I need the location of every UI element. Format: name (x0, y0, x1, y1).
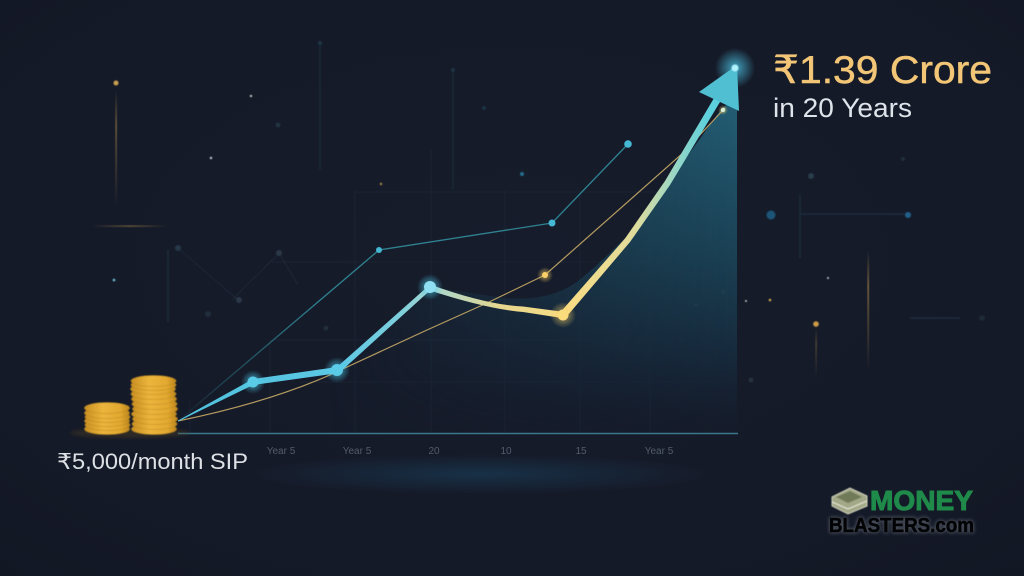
chart (178, 48, 755, 494)
logo word: MONEY: MONEY (870, 485, 973, 516)
headline subtitle: in 20 Years (773, 93, 912, 123)
main growth line (178, 93, 723, 422)
x axis labels (267, 446, 674, 457)
x axis labels: Year 5 (645, 446, 674, 457)
logo (829, 485, 974, 537)
label: monthly SIP: ₹5,000/month SIP (57, 449, 248, 474)
background grid (190, 150, 730, 432)
axis glow (250, 454, 710, 494)
area under curve (428, 105, 737, 393)
headline value: ₹1.39 Crore (773, 49, 992, 92)
logo halo behind BLASTERS.com: BLASTERS.com (829, 515, 974, 537)
data points (241, 105, 728, 394)
infographic canvas (58, 40, 990, 535)
thin teal trend line (178, 140, 632, 421)
x axis labels: 15 (575, 446, 587, 457)
small coin stack (84, 402, 130, 434)
x axis (178, 432, 738, 434)
x axis labels: Year 5 (267, 446, 296, 457)
arrow head (699, 48, 755, 111)
x axis labels: 10 (500, 446, 512, 457)
coin stacks (70, 376, 190, 438)
x axis labels: Year 5 (343, 446, 372, 457)
tall coin stack (130, 376, 178, 434)
x axis labels: 20 (428, 446, 440, 457)
logo icon: banknote stack (832, 488, 867, 514)
thin gold trend line (178, 108, 725, 421)
logo word: BLASTERS.com: BLASTERS.com (829, 515, 974, 537)
decorative particles and light streaks (92, 41, 985, 382)
